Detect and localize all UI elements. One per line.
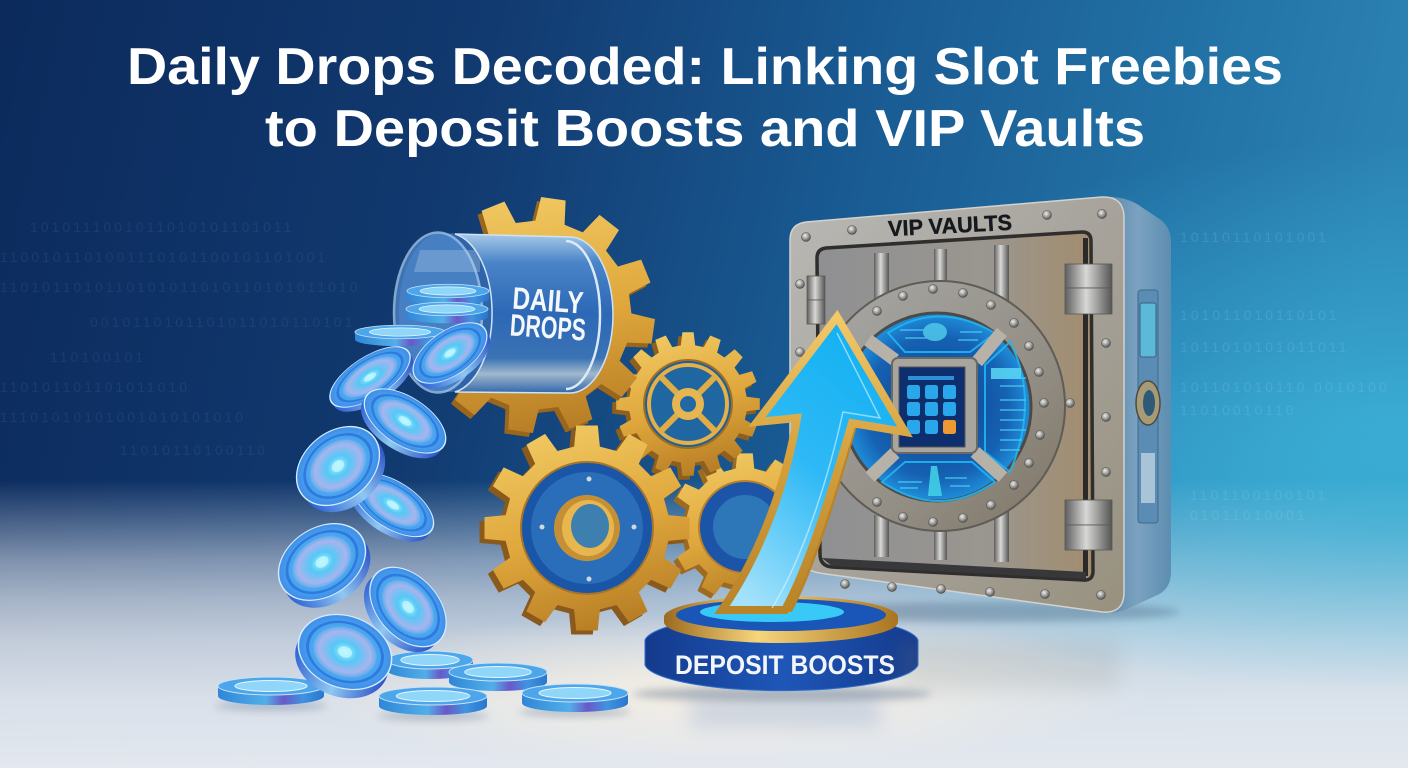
binary code pattern left: 11010110100110	[120, 442, 268, 458]
vault front frame	[790, 197, 1124, 612]
binary code pattern left: 110100101	[50, 349, 146, 365]
binary code pattern right: 11010010110	[1180, 402, 1297, 418]
pedestal shadow	[632, 686, 932, 702]
binary code pattern left: 110101101101011010	[0, 379, 190, 395]
hinges	[807, 264, 1112, 550]
cylinder body	[455, 234, 613, 393]
frame rivets	[796, 210, 1110, 600]
door seam	[1083, 238, 1088, 576]
porthole ring	[815, 281, 1065, 531]
cylinder open end	[394, 232, 500, 392]
pedestal	[632, 596, 932, 702]
binary code pattern left	[0, 219, 360, 458]
title	[127, 38, 1283, 158]
coins on floor	[215, 651, 631, 721]
metal spokes	[868, 332, 1003, 477]
binary code pattern right: 10110110101001	[1180, 229, 1329, 245]
gold disc	[664, 596, 898, 643]
porthole screen	[843, 313, 1031, 501]
title: Daily Drops Decoded: Linking Slot Freebies	[127, 38, 1283, 96]
keypad	[892, 358, 977, 453]
growth arrow	[722, 317, 909, 612]
inside cylinder coins	[355, 284, 501, 400]
floor shadows	[215, 701, 631, 721]
falling coins	[264, 284, 501, 711]
vault label: VIP VAULTS	[887, 210, 1013, 241]
glass cylinder	[394, 232, 613, 393]
blue base	[645, 614, 918, 691]
gear 2 spoked	[612, 332, 760, 480]
vault shadow	[800, 602, 1180, 622]
porthole rivets	[872, 284, 1048, 526]
arrow gold depth	[724, 318, 909, 612]
binary code pattern right: 1011010101011011	[1180, 339, 1349, 355]
door lower shadow	[822, 558, 1086, 579]
cylinder label	[509, 281, 587, 348]
binary code pattern right: 1101100100101	[1190, 487, 1328, 503]
binary code pattern left: 1010111001011010101101011	[30, 219, 294, 235]
binary code pattern right: 01011010001	[1190, 507, 1308, 523]
pedestal label: DEPOSIT BOOSTS	[675, 650, 895, 680]
binary code pattern left: 1100101101001110101100101101001	[0, 249, 328, 265]
title: to Deposit Boosts and VIP Vaults	[265, 100, 1145, 158]
vault side	[1105, 197, 1171, 613]
gear 3 blue hub	[480, 426, 689, 634]
binary code pattern right	[1180, 229, 1390, 523]
side panel	[1136, 290, 1160, 523]
glowing pool	[676, 599, 886, 631]
binary code pattern left: 11101010101001010101010	[0, 409, 246, 425]
screen details	[882, 316, 1026, 501]
cylinder label: DAILY	[511, 281, 585, 320]
cylinder rim	[566, 241, 600, 389]
binary code pattern right: 101011010110101	[1180, 307, 1340, 323]
binary code pattern left: 1101011010110101011010110101011010	[0, 279, 360, 295]
cylinder label: DROPS	[509, 307, 587, 348]
arrow face	[722, 317, 905, 610]
gear 1 large	[400, 182, 670, 452]
vault	[790, 197, 1180, 622]
floor reflections	[690, 640, 1120, 726]
binary code pattern left: 0010110101101011010110101	[90, 314, 356, 330]
arrow highlight	[772, 333, 880, 608]
locking bars	[874, 245, 1009, 562]
gear 4 behind arrow	[667, 453, 819, 605]
vault door	[817, 232, 1093, 580]
gears	[400, 182, 819, 634]
binary code pattern right: 101101010110 0010100	[1180, 379, 1390, 395]
